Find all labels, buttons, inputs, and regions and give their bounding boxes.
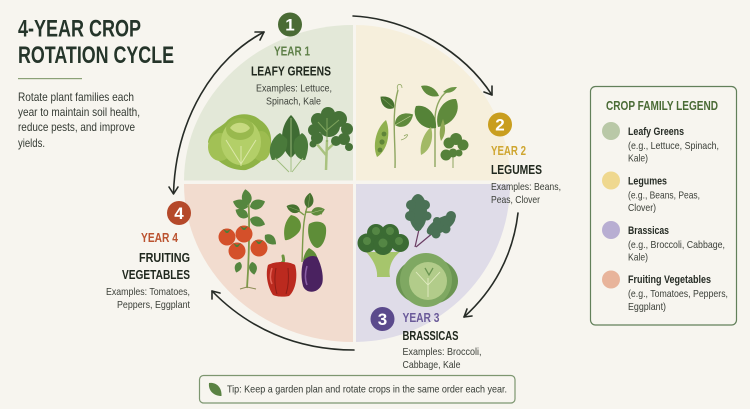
icon: leaf bbox=[209, 383, 222, 396]
intro text: Rotate plant families each bbox=[18, 90, 134, 104]
legend item: fruiting vegetables: Fruiting Vegetables bbox=[628, 274, 711, 286]
legend item: brassicas: (e.g., Broccoli, Cabbage, bbox=[628, 239, 725, 251]
label: year 1: Spinach, Kale bbox=[266, 96, 321, 108]
icon: pea plant bbox=[375, 84, 416, 168]
label: year 1: Examples: Lettuce, bbox=[256, 82, 332, 94]
icon: lettuce bbox=[208, 114, 271, 170]
label: year 2: YEAR 2 bbox=[491, 143, 526, 158]
label: year 1: YEAR 1 bbox=[274, 44, 310, 58]
quadrant: year 2 legumes bbox=[356, 25, 510, 180]
legend item: leafy greens: (e.g., Lettuce, Spinach, bbox=[628, 140, 719, 152]
legend item: brassicas bbox=[602, 221, 725, 264]
tip box bbox=[200, 376, 515, 403]
badge: year 2 bbox=[488, 112, 512, 136]
quadrant: year 1 leafy greens bbox=[184, 25, 353, 180]
icon: bean plant bbox=[415, 85, 458, 167]
label: year 2: Examples: Beans, bbox=[491, 181, 561, 193]
label: year 2: LEGUMES bbox=[491, 162, 542, 177]
intro text: year to maintain soil health, bbox=[18, 105, 140, 119]
arrow: year 2 to year 3 bbox=[464, 213, 518, 317]
icon: cabbage bbox=[396, 253, 458, 307]
legend item: brassicas: Kale) bbox=[628, 252, 648, 264]
icon: tomato plant bbox=[218, 188, 279, 289]
label: year 4 bbox=[106, 230, 190, 311]
badge: year 4: 4 bbox=[174, 204, 184, 223]
label: year 4: Examples: Tomatoes, bbox=[106, 286, 190, 298]
panel: crop family legend bbox=[590, 86, 736, 325]
label: year 3: YEAR 3 bbox=[402, 310, 440, 325]
label: year 3: Examples: Broccoli, bbox=[402, 346, 482, 358]
label: year 4: Peppers, Eggplant bbox=[117, 299, 190, 311]
tip text: Tip: Keep a garden plan and rotate crops in the same order each year. bbox=[227, 384, 507, 396]
badge: year 3: 3 bbox=[378, 310, 387, 329]
icon: broccoli bbox=[358, 224, 409, 277]
label: year 3 bbox=[402, 310, 482, 371]
legend item: legumes bbox=[602, 172, 700, 214]
quadrant: year 3 brassicas bbox=[356, 184, 510, 342]
icon: kale bbox=[308, 107, 353, 170]
legend item: fruiting vegetables: (e.g., Tomatoes, Peppers, bbox=[628, 288, 728, 300]
legend item: leafy greens: Leafy Greens bbox=[628, 126, 684, 138]
legend item: legumes: (e.g., Beans, Peas, bbox=[628, 190, 700, 202]
legend item: legumes: Clover) bbox=[628, 202, 656, 214]
badge: year 4 bbox=[167, 201, 191, 225]
label: year 1: LEAFY GREENS bbox=[251, 64, 331, 78]
label: year 4: FRUITING bbox=[139, 250, 190, 265]
label: year 4: VEGETABLES bbox=[122, 267, 190, 282]
intro text: yields. bbox=[18, 136, 45, 150]
arrow: year 4 to year 1 bbox=[169, 32, 264, 194]
icon: red pepper bbox=[267, 256, 296, 297]
legend item: brassicas: Brassicas bbox=[628, 225, 669, 237]
arrow: year 3 to year 4 bbox=[212, 291, 354, 350]
title: ROTATION CYCLE bbox=[18, 42, 174, 69]
title bbox=[18, 16, 174, 69]
label: year 3: BRASSICAS bbox=[402, 328, 459, 343]
icon: spinach bbox=[270, 115, 308, 172]
quadrant: year 4 fruiting vegetables bbox=[184, 184, 353, 342]
icon: clover bbox=[440, 133, 468, 168]
badge: year 2: 2 bbox=[495, 116, 505, 134]
title: 4-YEAR CROP bbox=[18, 16, 141, 42]
legend item: legumes: Legumes bbox=[628, 176, 667, 188]
label: year 1 bbox=[251, 44, 332, 108]
badge: year 3 bbox=[370, 307, 394, 331]
label: year 2 bbox=[491, 143, 561, 206]
arrow: year 1 to year 2 bbox=[353, 16, 492, 95]
legend heading: CROP FAMILY LEGEND bbox=[606, 98, 718, 113]
legend item: fruiting vegetables: Eggplant) bbox=[628, 301, 666, 313]
intro text: reduce pests, and improve bbox=[18, 120, 135, 134]
legend item: leafy greens bbox=[602, 122, 719, 164]
icon: pepper plant bbox=[284, 192, 326, 262]
label: year 4: YEAR 4 bbox=[141, 230, 179, 245]
badge: year 1 bbox=[278, 12, 302, 36]
badge: year 1: 1 bbox=[285, 16, 295, 34]
label: year 3: Cabbage, Kale bbox=[402, 359, 461, 371]
legend item: fruiting vegetables bbox=[602, 270, 728, 313]
label: year 2: Peas, Clover bbox=[491, 194, 540, 206]
title divider bbox=[18, 78, 82, 79]
icon: purple kale leaves bbox=[405, 194, 458, 247]
icon: eggplant bbox=[302, 248, 323, 292]
intro text bbox=[18, 90, 140, 150]
legend item: leafy greens: Kale) bbox=[628, 152, 648, 164]
